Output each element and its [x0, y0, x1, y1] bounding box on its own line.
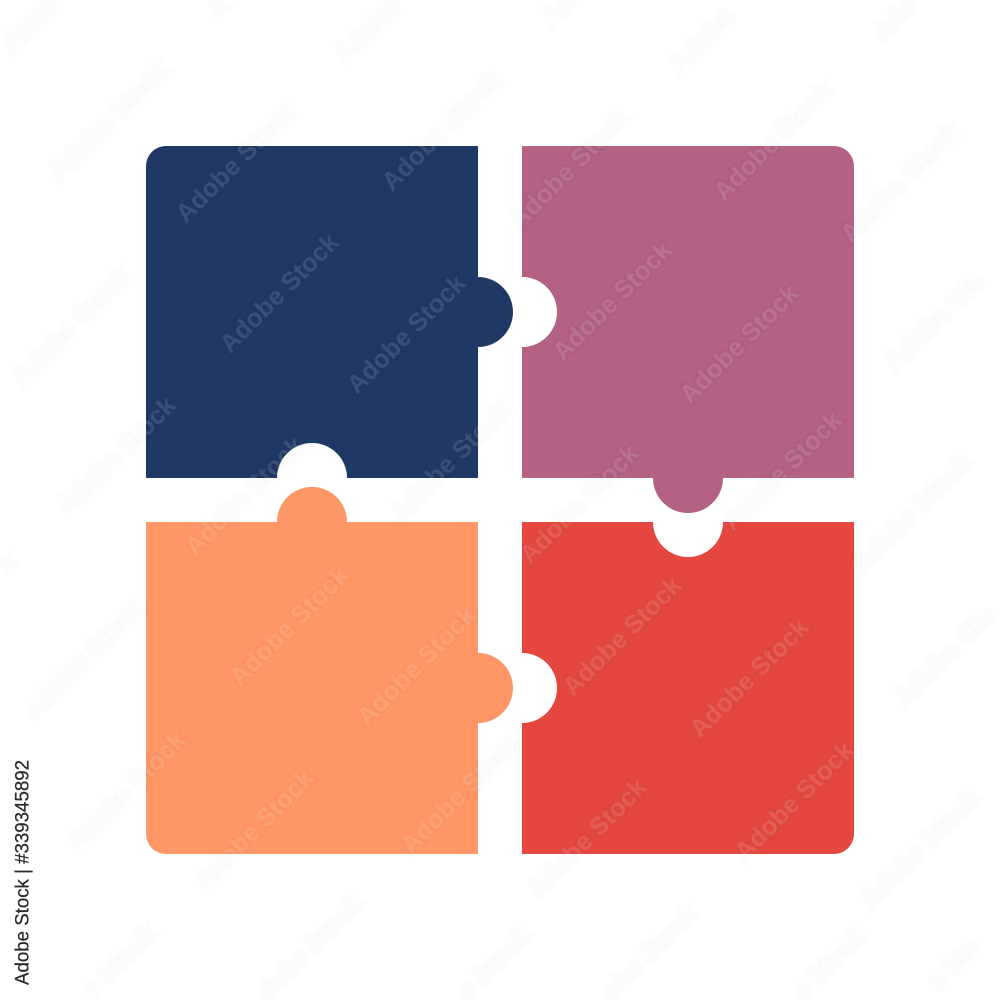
watermark pattern: Adobe Stock [547, 236, 678, 366]
watermark pattern: Adobe Stock [835, 118, 966, 248]
watermark pattern: Adobe Stock [385, 396, 516, 526]
puzzle grid [146, 146, 854, 854]
watermark pattern: e Sto [921, 932, 985, 996]
watermark pattern: Adobe Stock [557, 571, 688, 701]
side credit text: Adobe Stock | #339345892 [12, 760, 34, 985]
watermark pattern: Adobe Stock [846, 448, 977, 578]
watermark pattern: Adobe Stock [6, 261, 137, 391]
puzzle piece: navy top-left [146, 146, 513, 478]
watermark pattern: Adobe Stock [189, 764, 320, 894]
watermark pattern: Adobe Stock [376, 66, 507, 196]
watermark pattern: Adobe Stock [351, 601, 482, 731]
watermark pattern: Adobe Stock [224, 561, 355, 691]
watermark pattern: Adobe Stock [61, 726, 192, 856]
watermark pattern: Adobe Stock [170, 98, 301, 228]
watermark pattern: Adobe Stock [341, 269, 472, 399]
watermark pattern: Adobe Stock [51, 391, 182, 521]
watermark pattern: Adobe Stock [522, 773, 653, 903]
watermark pattern: Adobe Stock [854, 784, 985, 914]
puzzle piece: mauve top-right [522, 146, 854, 513]
watermark pattern: Adobe Stock [504, 104, 635, 234]
watermark pattern: Adobe Sto [879, 266, 989, 376]
watermark pattern: Adobe Stock [43, 56, 174, 186]
watermark pattern: Adobe Stock [708, 76, 839, 206]
watermark pattern: Adobe Stock [395, 729, 526, 859]
watermark pattern: Adobe Stock [684, 613, 815, 743]
watermark pattern: Adobe Stock [729, 736, 860, 866]
watermark pattern: Adobe Sto [889, 601, 999, 711]
watermark pattern: Adobe Stock [18, 594, 149, 724]
watermark pattern: Adobe Stock [717, 406, 848, 536]
watermark pattern: Adobe Stock [214, 228, 345, 358]
puzzle piece: red bottom-right [522, 522, 854, 854]
puzzle piece: orange bottom-left [146, 487, 513, 854]
watermark pattern: Adobe [663, 2, 739, 78]
watermark pattern: Adobe Stock [179, 431, 310, 561]
watermark pattern: Adobe Stock [514, 439, 645, 569]
watermark pattern: Adobe Stock [674, 279, 805, 409]
